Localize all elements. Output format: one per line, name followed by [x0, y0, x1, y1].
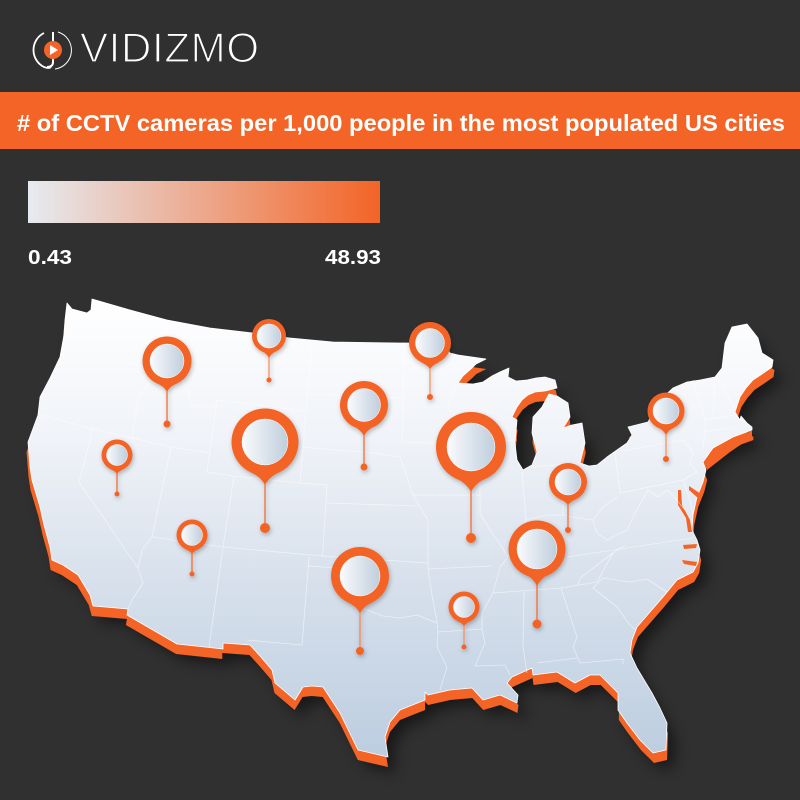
legend maximum: 48.93: [325, 247, 381, 269]
pin: 7: [331, 547, 389, 655]
legend gradient bar: [28, 181, 380, 223]
title banner: [0, 92, 800, 149]
title: # of CCTV cameras per 1,000 people in the most populated US cities: [17, 110, 785, 136]
pin: 2: [252, 319, 286, 382]
pin: 13: [448, 592, 480, 650]
map shadow: [36, 315, 781, 773]
legend minimum: 0.43: [28, 247, 72, 269]
pin: 3: [340, 381, 388, 470]
map of the United States: [27, 299, 781, 773]
pin: 4: [232, 408, 298, 533]
pin: 12: [508, 520, 566, 628]
pin: 6: [176, 520, 208, 576]
pin: 8: [409, 322, 451, 400]
state borders: [38, 320, 735, 690]
pin: 9: [436, 412, 506, 543]
pin: 11: [549, 463, 587, 533]
pin: 5: [102, 440, 132, 496]
icon: logo mark: [33, 32, 71, 69]
logo: [33, 24, 259, 71]
coastal bays and Long Island: [678, 430, 752, 566]
map land: [28, 299, 773, 757]
pin: 1: [142, 336, 192, 428]
logo wordmark: VIDIZMO: [80, 24, 259, 71]
legend: [28, 181, 381, 269]
map extrusion: [27, 309, 774, 767]
pin: 10: [648, 392, 684, 462]
